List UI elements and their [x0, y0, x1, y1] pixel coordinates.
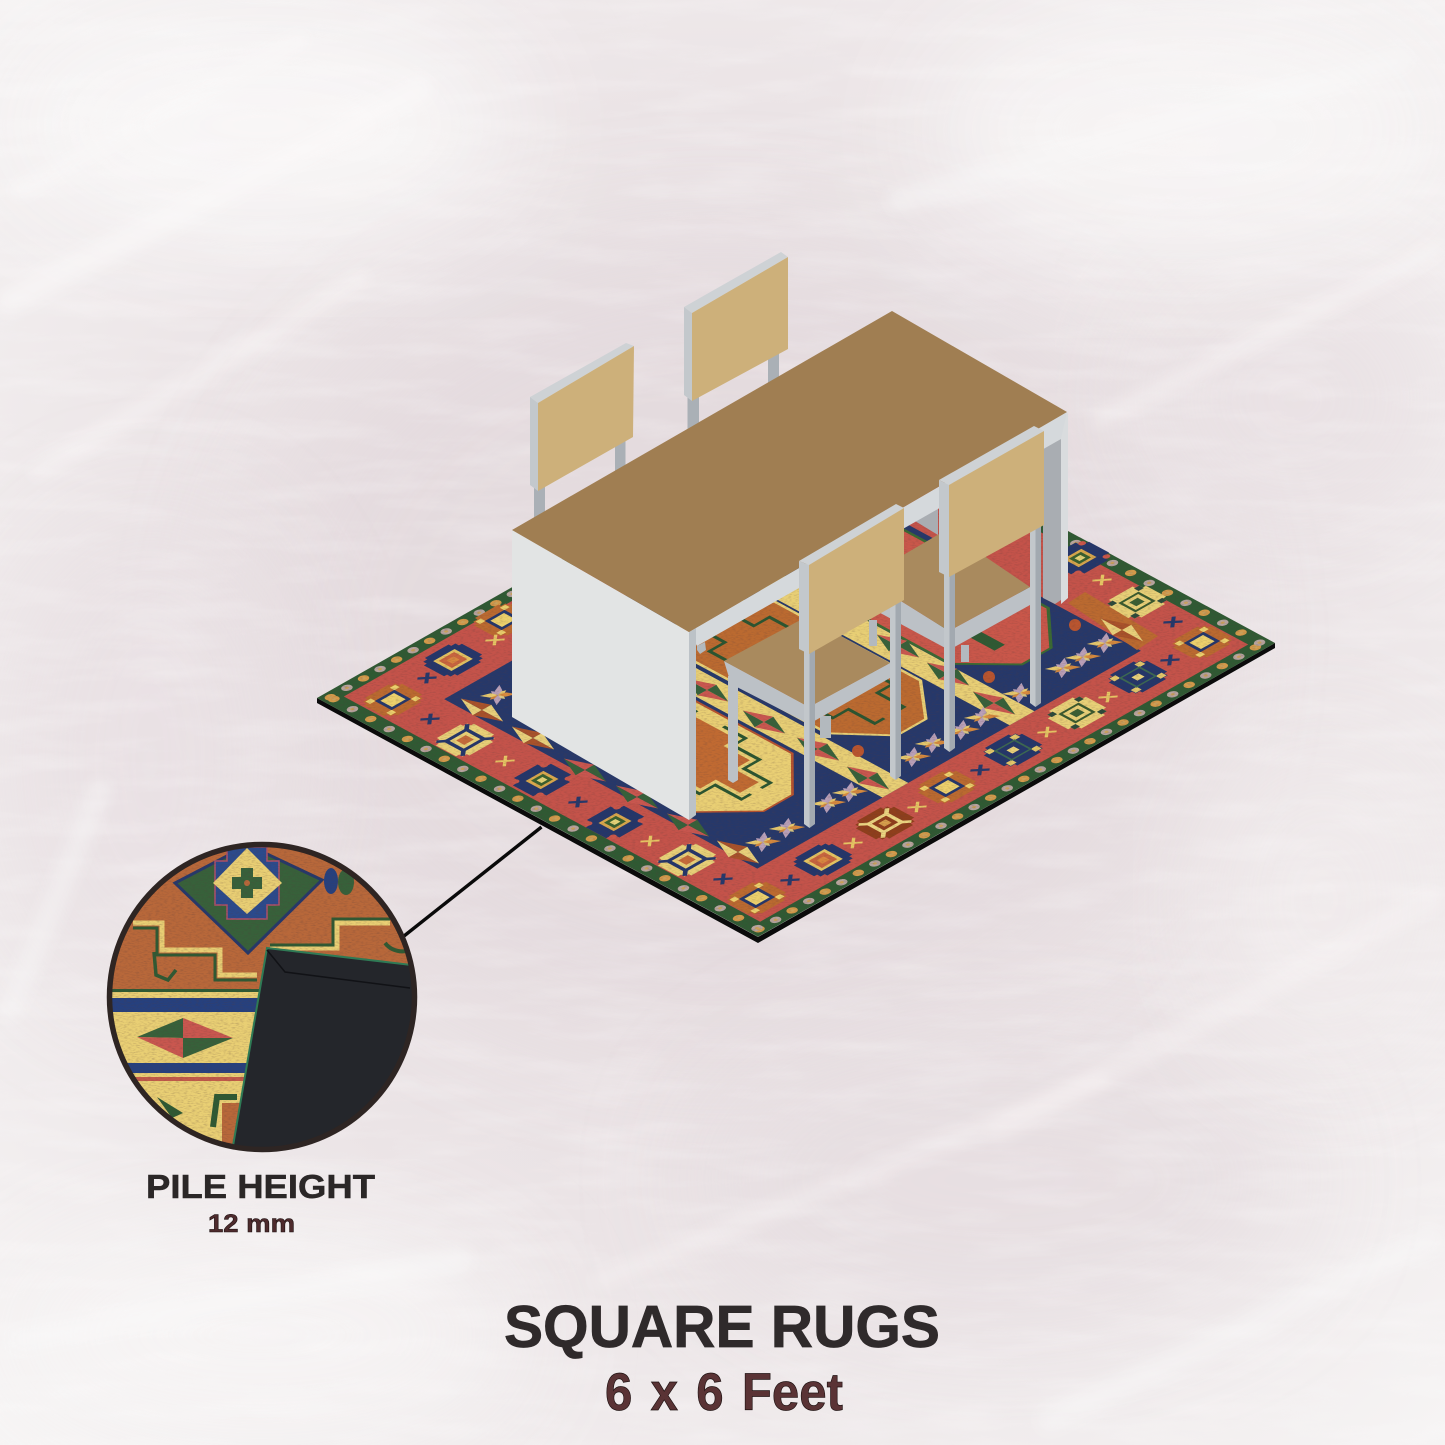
rug backing fold — [233, 948, 420, 1150]
chair: front right — [864, 426, 1044, 752]
rug surface pattern — [317, 404, 1275, 937]
zigzag lines — [133, 923, 257, 975]
chair: rear left — [530, 343, 634, 522]
rug border motifs — [358, 538, 1237, 918]
brown corner wedge — [1068, 592, 1158, 650]
medallion strips — [569, 542, 1034, 798]
table — [512, 311, 1068, 820]
table near rail bracket — [697, 642, 706, 654]
table white end panel — [512, 530, 689, 820]
table inner rail — [915, 508, 938, 535]
title: square rugs: SQUARE RUGS — [504, 1294, 940, 1360]
detail circle: rug pile and backing — [105, 844, 420, 1152]
medallion: orange — [644, 581, 958, 754]
lens motif — [137, 1018, 183, 1038]
chair: rear right — [684, 252, 788, 429]
rug: square patterned rug in isometric view — [317, 486, 1275, 943]
subtitle: size: 6 x 6 Feet — [605, 1363, 843, 1422]
rug navy centre field — [444, 481, 1141, 869]
chair: front left — [724, 504, 904, 828]
label: pile height: PILE HEIGHT — [146, 1168, 375, 1205]
medallion: yellow — [506, 654, 830, 832]
rug black base edge — [317, 643, 1275, 943]
leader line from rug to detail circle — [402, 827, 542, 938]
label: 12 mm: 12 mm — [208, 1210, 295, 1238]
diamond motif — [175, 845, 322, 953]
table far leg — [1043, 437, 1061, 604]
rug field lens diamonds and stars — [452, 613, 1152, 869]
table apron — [689, 412, 1067, 646]
table top — [512, 311, 1067, 632]
medallion: red — [767, 509, 1086, 684]
